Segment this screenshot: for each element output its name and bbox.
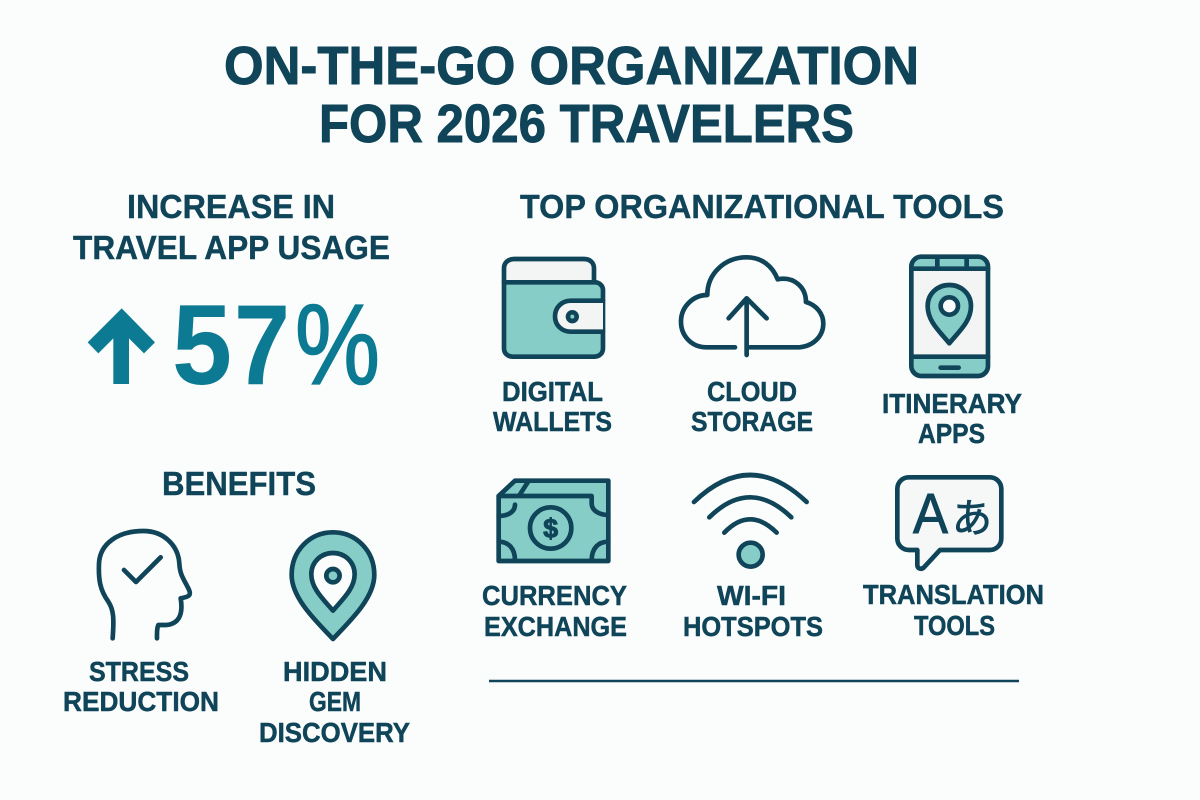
heading: increase in travel app usage: TRAVEL APP USAGE <box>73 229 390 266</box>
label: cloud storage <box>691 376 813 437</box>
label: stress reduction <box>63 656 219 717</box>
panel: benefits <box>63 465 410 748</box>
stat: 57 percent: % <box>295 282 380 409</box>
label: stress reduction: REDUCTION <box>63 686 219 717</box>
title: ON-THE-GO ORGANIZATION <box>224 36 919 96</box>
label: cloud storage: CLOUD <box>707 376 797 407</box>
dollar sign: $ <box>543 514 558 544</box>
label: wi-fi hotspots: WI-FI <box>717 580 786 611</box>
label: itinerary apps: ITINERARY <box>882 388 1022 419</box>
icon: phone with map pin <box>911 257 988 376</box>
panel: travel app usage stat <box>73 188 390 409</box>
label: currency exchange: EXCHANGE <box>484 611 627 642</box>
label: wi-fi hotspots: HOTSPOTS <box>683 611 823 642</box>
label: stress reduction: STRESS <box>89 656 189 687</box>
icon: translation speech bubble: A <box>913 482 948 546</box>
label: currency exchange: CURRENCY <box>482 580 627 611</box>
heading: increase in travel app usage <box>73 188 390 266</box>
label: digital wallets <box>493 376 612 437</box>
icon: location pin <box>292 532 374 639</box>
label: currency exchange <box>482 580 627 642</box>
stat: 57 percent: 5 <box>172 282 232 409</box>
title <box>224 36 919 154</box>
icon: translation speech bubble <box>897 477 1001 569</box>
title: FOR 2026 TRAVELERS <box>319 94 854 154</box>
stat: 57 percent <box>172 282 380 409</box>
icon: head with check mark <box>99 531 190 638</box>
label: translation tools: TOOLS <box>914 610 995 641</box>
label: translation tools: TRANSLATION <box>863 579 1044 610</box>
panel: top organizational tools <box>482 188 1044 642</box>
heading: benefits: BENEFITS <box>162 465 316 502</box>
label: itinerary apps: APPS <box>918 418 985 449</box>
icon: banknote <box>499 481 608 561</box>
label: digital wallets: DIGITAL <box>502 376 603 407</box>
label: hidden gem discovery: GEM <box>309 686 361 717</box>
heading: top organizational tools: TOP ORGANIZATIONAL TOOLS <box>520 188 1004 225</box>
stat: 57 percent: 7 <box>234 282 290 409</box>
label: wi-fi hotspots <box>683 580 823 642</box>
icon: up arrow <box>88 308 155 384</box>
label: hidden gem discovery: DISCOVERY <box>259 717 410 748</box>
heading: increase in travel app usage: INCREASE IN <box>127 188 335 225</box>
label: translation tools <box>863 579 1044 641</box>
label: itinerary apps <box>882 388 1022 449</box>
icon: cloud upload <box>681 257 823 355</box>
icon: translation speech bubble: あ <box>952 497 992 541</box>
label: cloud storage: STORAGE <box>691 406 813 437</box>
icon: wi-fi signal <box>694 475 807 567</box>
label: hidden gem discovery: HIDDEN <box>283 656 387 687</box>
icon: digital wallet <box>504 259 603 357</box>
label: hidden gem discovery <box>259 656 410 748</box>
label: digital wallets: WALLETS <box>493 406 612 437</box>
